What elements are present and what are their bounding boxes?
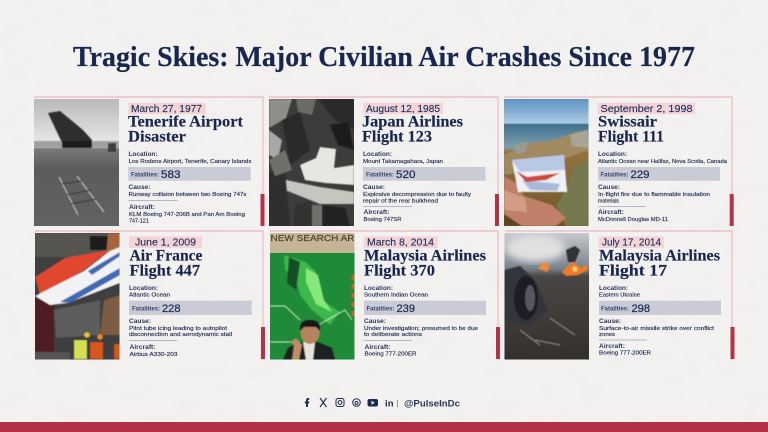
- photo: Swissair shoreline: [504, 99, 588, 226]
- aircraft: 747-121: [129, 218, 149, 224]
- cause: materials: [598, 198, 619, 204]
- photo: MH370 search map briefing: [270, 233, 355, 360]
- photo: MH17 wreckage and fire: [504, 233, 589, 360]
- cause: zones: [599, 332, 615, 338]
- cause: [598, 184, 710, 204]
- fatalities: Fatalities:: [601, 306, 629, 312]
- cause: [599, 318, 714, 338]
- photo: Tenerife wreckage: [34, 99, 119, 226]
- fatalities: [363, 167, 486, 181]
- fatalities: [129, 301, 252, 315]
- cause: Cause:: [129, 318, 151, 325]
- heading: Japan Airlines: [362, 114, 463, 131]
- location: Los Rodeos Airport, Tenerife, Canary Islands: [128, 159, 252, 165]
- fatalities: 520: [396, 169, 416, 181]
- heading: Tenerife Airport: [128, 114, 244, 131]
- icon: facebook: [305, 398, 309, 407]
- cause: Cause:: [128, 184, 150, 191]
- location: [599, 285, 640, 299]
- heading: Swissair: [598, 114, 657, 131]
- heading: [599, 247, 720, 280]
- cause: [364, 318, 478, 338]
- location: [363, 151, 443, 165]
- heading: [128, 114, 244, 146]
- date: March 27, 1977: [131, 104, 202, 115]
- fatalities: 298: [632, 303, 650, 315]
- aircraft: Aircraft:: [364, 344, 390, 351]
- location: Southern Indian Ocean: [364, 293, 428, 299]
- cause: Cause:: [363, 184, 385, 191]
- cause: disconnection and aerodynamic stall: [129, 332, 232, 338]
- heading: Flight 17: [599, 263, 667, 280]
- location: [128, 151, 252, 165]
- cause: Surface-to-air missile strike over conflict: [599, 326, 714, 332]
- icon: X: [320, 398, 326, 407]
- heading: [362, 114, 463, 146]
- heading: Disaster: [128, 128, 186, 146]
- accent bar: [496, 327, 500, 359]
- aircraft: Aircraft:: [598, 209, 624, 216]
- linkedin and handle: in: [385, 398, 394, 409]
- heading: Flight 447: [130, 263, 200, 280]
- location: Atlantic Ocean: [129, 293, 170, 299]
- fatalities: 583: [161, 169, 180, 181]
- location: Eastern Ukraine: [599, 293, 640, 299]
- aircraft: McDonnell Douglas MD-11: [598, 217, 668, 223]
- aircraft: [130, 344, 178, 358]
- panel: Tenerife Airport Disaster: [34, 97, 264, 226]
- heading: Flight 123: [362, 128, 432, 146]
- photo caption text: NEW SEARCH AR: [270, 234, 355, 243]
- cause: Explosive decompression due to faulty: [363, 192, 471, 198]
- cause: Pitot tube icing leading to autopilot: [129, 326, 227, 332]
- icon: instagram: [336, 398, 344, 406]
- footer band: [0, 422, 768, 432]
- aircraft: [599, 343, 651, 356]
- social footer: [305, 398, 460, 409]
- accent bar: [260, 194, 264, 226]
- date: August 12, 1985: [366, 104, 440, 115]
- cause: Cause:: [364, 318, 386, 325]
- panel: Malaysia Airlines Flight 17: [504, 231, 734, 360]
- fatalities: Fatalities:: [600, 172, 628, 178]
- aircraft: Aircraft:: [599, 343, 625, 350]
- aircraft: Aircraft:: [364, 209, 390, 216]
- aircraft: Airbus A330-203: [130, 352, 178, 358]
- cause: [129, 318, 232, 338]
- heading: Flight 111: [598, 128, 664, 146]
- fatalities: Fatalities:: [131, 172, 159, 178]
- heading: [364, 247, 486, 280]
- cause: Cause:: [599, 318, 621, 325]
- cause: [363, 184, 471, 204]
- fatalities: [598, 167, 720, 181]
- heading: Malaysia Airlines: [364, 247, 486, 264]
- fatalities: Fatalities:: [366, 172, 394, 178]
- fatalities: [599, 301, 721, 315]
- location: [598, 151, 728, 165]
- panel: Malaysia Airlines Flight 370: [270, 231, 500, 360]
- aircraft: [598, 209, 668, 223]
- heading: Malaysia Airlines: [599, 247, 720, 264]
- fatalities: 228: [162, 303, 180, 315]
- heading: Flight 370: [364, 263, 435, 280]
- location: [129, 285, 170, 299]
- accent bar: [730, 327, 734, 359]
- aircraft: [129, 204, 245, 224]
- cause: Cause:: [598, 184, 620, 191]
- location: Location:: [598, 151, 627, 158]
- panel: Swissair Flight 111: [504, 97, 734, 226]
- date: June 1, 2009: [135, 238, 196, 249]
- heading: Air France: [130, 247, 202, 264]
- fatalities: [128, 167, 251, 181]
- aircraft: Aircraft:: [129, 204, 155, 211]
- aircraft: [364, 209, 402, 223]
- fatalities: [364, 301, 486, 315]
- cause: Under investigation; presumed to be due: [364, 326, 478, 332]
- icon: youtube: [368, 399, 378, 406]
- cause: In-flight fire due to flammable insulation: [598, 192, 710, 198]
- heading: [130, 247, 202, 280]
- cause: to deliberate actions: [364, 332, 422, 338]
- aircraft: Boeing 777-200ER: [599, 350, 651, 356]
- location: Location:: [363, 151, 392, 158]
- aircraft: Aircraft:: [130, 344, 156, 351]
- cause: [128, 184, 247, 198]
- fatalities: 229: [630, 169, 650, 181]
- location: Location:: [364, 285, 393, 292]
- cause: repair of the rear bulkhead: [363, 198, 438, 204]
- aircraft: Boeing 747SR: [364, 217, 402, 223]
- panel: Air France Flight 447: [35, 231, 265, 360]
- location: Location:: [129, 285, 158, 292]
- accent bar: [261, 327, 265, 359]
- location: Mount Takamagahara, Japan: [363, 159, 443, 165]
- fatalities: Fatalities:: [366, 306, 394, 312]
- title: Tragic Skies: Major Civilian Air Crashes Since 1977: [73, 42, 695, 73]
- heading: [598, 114, 664, 146]
- date: July 17, 2014: [602, 238, 661, 249]
- fatalities: 239: [396, 303, 415, 315]
- linkedin and handle: |: [396, 399, 399, 408]
- aircraft: Boeing 777-200ER: [364, 352, 416, 358]
- date: March 8, 2014: [367, 238, 434, 249]
- location: Location:: [128, 151, 158, 158]
- location: Atlantic Ocean near Halifax, Nova Scotia, Canada: [598, 159, 728, 165]
- aircraft: [364, 344, 416, 358]
- cause: Runway collision between two Boeing 747s: [128, 192, 247, 198]
- location: Location:: [599, 285, 628, 292]
- icon: threads: [353, 399, 360, 406]
- date: September 2, 1998: [600, 104, 693, 115]
- aircraft: KLM Boeing 747-206B and Pan Am Boeing: [129, 212, 245, 218]
- location: [364, 285, 428, 299]
- photo: Japan Airlines wreckage: [269, 99, 354, 226]
- accent bar: [730, 194, 734, 226]
- fatalities: Fatalities:: [132, 306, 160, 312]
- photo: Air France tail recovery: [35, 233, 120, 360]
- linkedin and handle: @PulseInDc: [404, 398, 460, 409]
- panel: Japan Airlines Flight 123: [269, 97, 499, 226]
- accent bar: [495, 194, 499, 226]
